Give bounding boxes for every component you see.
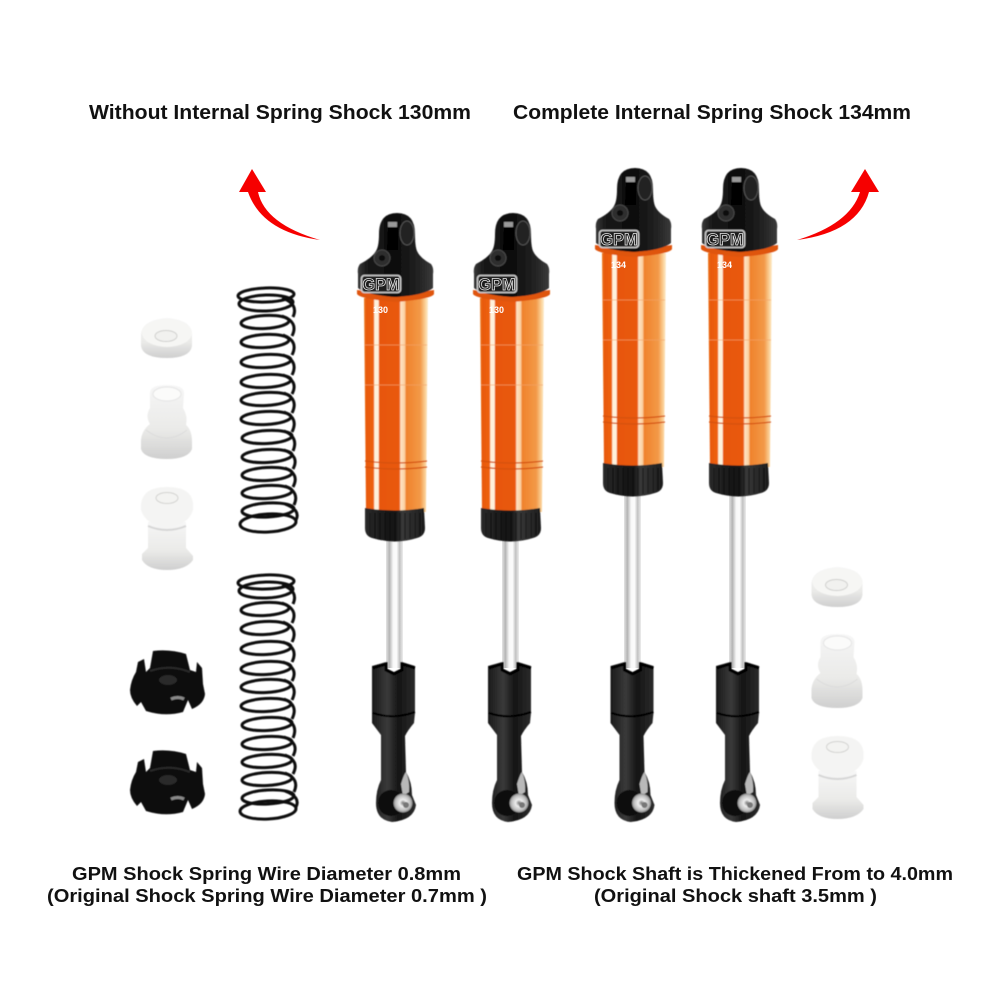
- shock 2: GPM: [478, 275, 516, 294]
- black cup 1: [130, 650, 205, 714]
- title: complete internal spring: Complete Internal Spring Shock 134mm: [513, 101, 911, 124]
- arrow: left red: [239, 169, 320, 240]
- shock 4: 134: [717, 260, 732, 270]
- shock 4: [701, 168, 778, 822]
- shock 3: [595, 168, 672, 822]
- shock 1: GPM: [362, 275, 400, 294]
- shock 3: 134: [611, 260, 626, 270]
- caption: spring wire diameter: [47, 863, 487, 906]
- bushing ring left: [141, 318, 192, 358]
- shock 2: 130: [489, 305, 504, 315]
- bushing right: [812, 634, 862, 708]
- bushing ring right: [812, 567, 863, 607]
- arrow: right red: [797, 169, 879, 240]
- double flange left: [141, 487, 193, 570]
- title: without internal spring: Without Internal Spring Shock 130mm: [89, 101, 471, 124]
- caption: shaft thickness: GPM Shock Shaft is Thickened From to 4.0mm: [517, 863, 953, 884]
- spring 2: [238, 574, 297, 820]
- bushing left: [141, 385, 192, 459]
- caption: spring wire diameter: (Original Shock Spring Wire Diameter 0.7mm ): [47, 885, 487, 906]
- shock 4: GPM: [706, 230, 744, 249]
- double flange right: [812, 736, 864, 819]
- spring 1: [238, 287, 297, 533]
- shock 2: [473, 213, 550, 822]
- black cup 2: [130, 750, 205, 814]
- caption: shaft thickness: (Original Shock shaft 3.5mm ): [594, 885, 877, 906]
- shock 1: [357, 213, 434, 822]
- shock 1: 130: [373, 305, 388, 315]
- caption: shaft thickness: [517, 863, 953, 906]
- shock 3: GPM: [600, 230, 638, 249]
- caption: spring wire diameter: GPM Shock Spring Wire Diameter 0.8mm: [72, 863, 461, 884]
